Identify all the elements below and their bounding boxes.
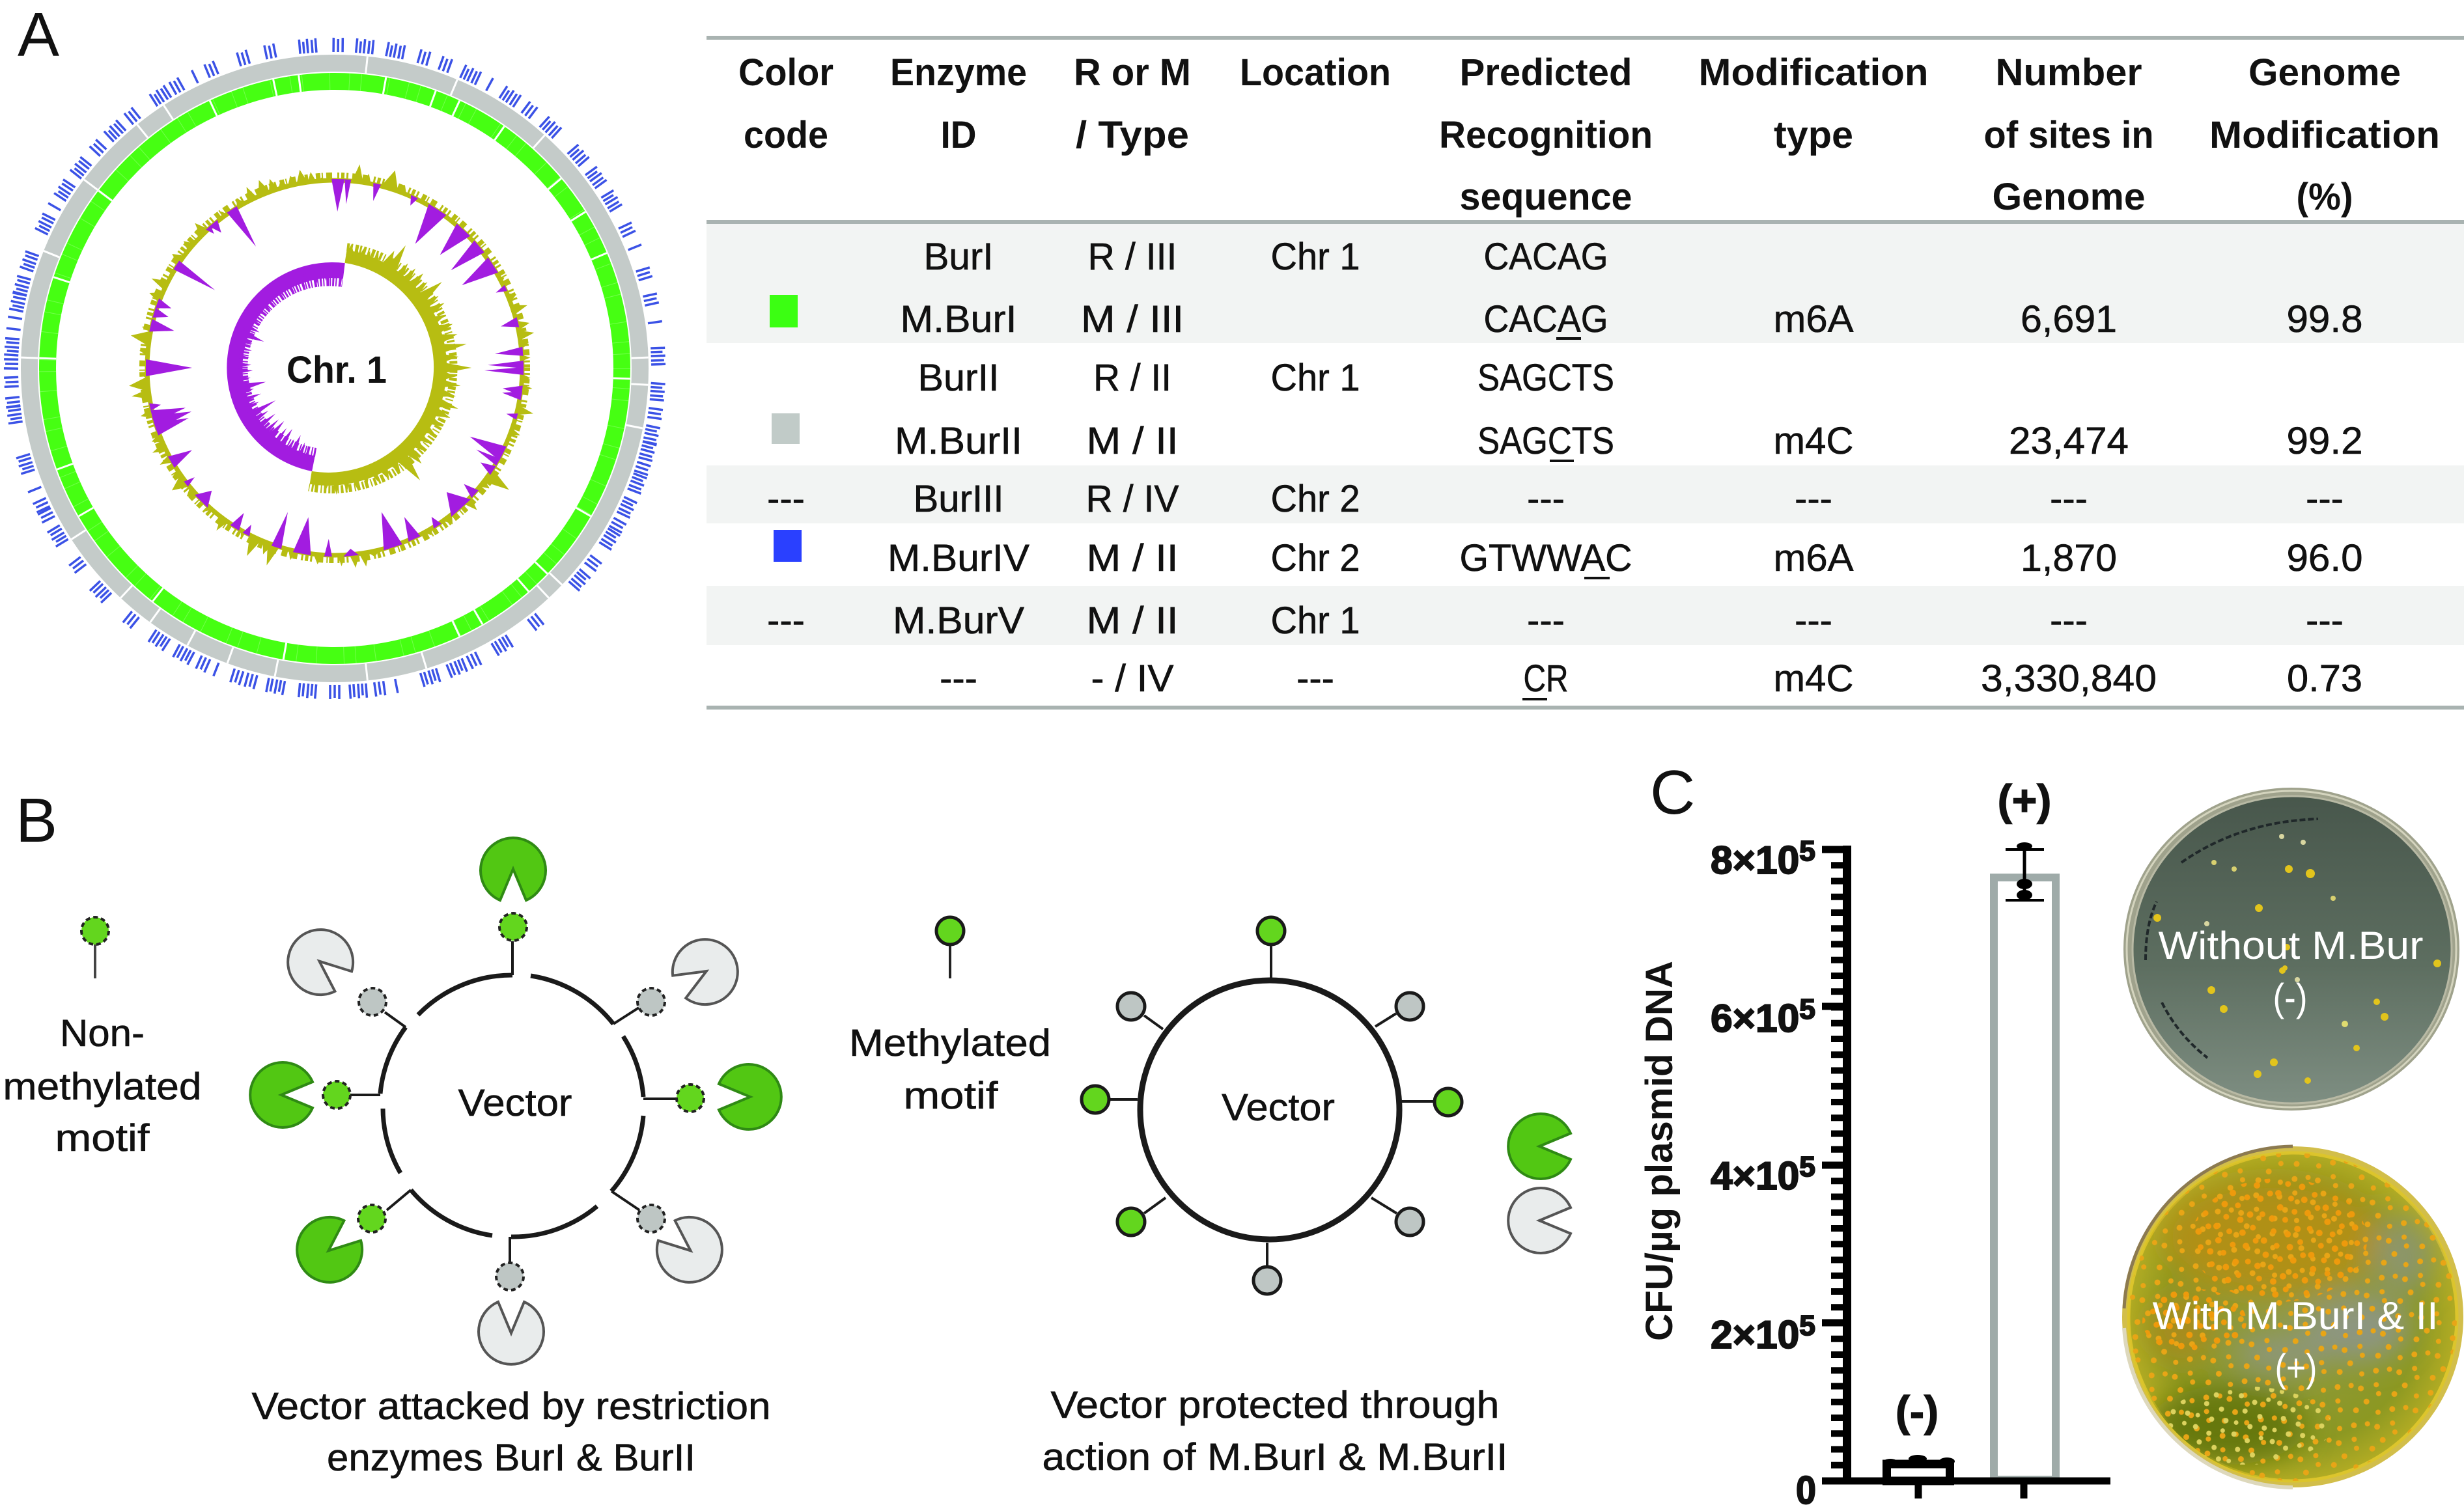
x axis (1822, 1481, 2110, 1498)
table body text: Chr 1 (1271, 600, 1360, 642)
plate photo: with M.BurI & II: (+) (2275, 1346, 2317, 1390)
table body text: --- (2306, 478, 2344, 520)
y tick labels (1711, 835, 1816, 1505)
table header (738, 51, 2440, 218)
error bar (+) (2006, 842, 2044, 900)
table body text: m6A (1774, 537, 1854, 579)
table body text: CR (1524, 657, 1568, 700)
table body text: SAGCTS (1477, 420, 1614, 462)
table body text: BurI (923, 236, 994, 278)
vector label: Vector (1222, 1086, 1335, 1129)
table body text: CACAG (1483, 298, 1608, 340)
label (+): (+) (1998, 776, 2051, 824)
table body text: BurII (918, 357, 999, 399)
table body text: BurIII (913, 478, 1004, 520)
colonies (2153, 834, 2441, 1084)
methylated motif dots (1082, 917, 1462, 1294)
y axis with ticks (1822, 846, 1851, 1484)
green track: CACAG sites (39, 75, 630, 659)
caption protected: action of M.BurI & M.BurII (1042, 1436, 1508, 1478)
table header: code (744, 114, 828, 156)
table body text: --- (1527, 600, 1565, 642)
y tick labels: 6×10 (1711, 997, 1799, 1040)
table header: Modification (1698, 51, 1929, 94)
table body text: --- (2050, 478, 2088, 520)
plate photo: without M.Bur: (-) (2273, 976, 2308, 1019)
panel B label: B (16, 786, 57, 855)
y axis title: CFU/µg plasmid DNA (1638, 961, 1681, 1341)
label (-): (-) (1896, 1387, 1939, 1435)
legend: methylated motif (849, 917, 1051, 1117)
table header: Location (1240, 51, 1391, 94)
table header: Color (738, 51, 833, 94)
table header: / Type (1076, 114, 1189, 156)
chromosome label: Chr. 1 (287, 349, 387, 391)
y tick labels: 5 (1799, 993, 1815, 1025)
y tick labels: 5 (1799, 835, 1815, 867)
table body text: CACAG (1483, 236, 1608, 278)
handwriting on plate (2146, 819, 2318, 1058)
table body text: - / IV (1091, 657, 1174, 700)
panel: enzyme table (707, 36, 2464, 710)
plate text: Without M.Bur (2158, 924, 2424, 967)
restriction enzymes attacking (250, 838, 781, 1364)
vector label: Vector (458, 1082, 572, 1124)
table body text: 96.0 (2287, 537, 2362, 579)
table header: Enzyme (890, 51, 1027, 94)
table body text: Chr 1 (1271, 357, 1360, 399)
color code legend squares (770, 295, 802, 562)
caption attacked: enzymes BurI & BurII (327, 1437, 695, 1479)
table body text: m4C (1774, 657, 1853, 700)
table header: of sites in (1983, 114, 2154, 156)
table body text: 3,330,840 (1981, 657, 2157, 700)
table body text: --- (2050, 600, 2088, 642)
legend: non-methylated motif (3, 917, 202, 1159)
plate photo: without M.Bur (2123, 788, 2459, 1111)
table body text: GTWWAC (1460, 537, 1632, 579)
table body text: --- (767, 600, 805, 642)
table body text: --- (1795, 478, 1832, 520)
table body text: Chr 2 (1271, 537, 1360, 579)
y tick labels: 8×10 (1711, 838, 1799, 882)
table body text: 6,691 (2021, 298, 2117, 340)
free restriction enzymes (1508, 1114, 1571, 1253)
y tick labels: 4×10 (1711, 1154, 1799, 1198)
caption attacked: Vector attacked by restriction (251, 1385, 771, 1428)
table header: sequence (1460, 176, 1632, 218)
caption protected: Vector protected through (1051, 1384, 1499, 1426)
table body text: M / II (1086, 600, 1179, 642)
table header: ID (940, 114, 977, 156)
intact vector circle with stems (1110, 944, 1435, 1267)
middle ring: GC content (128, 163, 535, 568)
table body text: 0.73 (2287, 657, 2362, 700)
y tick labels: 5 (1799, 1310, 1815, 1342)
panel: vector attacked (3, 838, 781, 1479)
table body text (767, 236, 2362, 700)
grey track: SAGCTS sites (21, 57, 649, 680)
legend: non-methylated motif: motif (55, 1117, 150, 1159)
dashed motif dots (323, 913, 704, 1290)
table body text: M.BurIV (888, 537, 1029, 579)
table body text: M / II (1086, 537, 1179, 579)
table body text: M.BurI (900, 298, 1017, 340)
table body text: --- (940, 657, 977, 700)
table header: Recognition (1439, 114, 1653, 156)
table body text: 23,474 (2009, 420, 2129, 462)
table header: (%) (2296, 176, 2353, 218)
colonies (2122, 1146, 2463, 1487)
panel C label: C (1650, 758, 1695, 827)
table body text: M / II (1086, 420, 1179, 462)
table body text: R / IV (1086, 478, 1179, 520)
table body text: --- (1795, 600, 1832, 642)
bar (-) (1883, 1455, 1955, 1481)
table body text: 99.8 (2287, 298, 2362, 340)
table header: Number (1995, 51, 2142, 94)
plate text: With M.BurI & II (2153, 1294, 2438, 1338)
table body text: --- (1296, 657, 1334, 700)
table body text: m6A (1774, 298, 1854, 340)
table header: Genome (1993, 176, 2145, 218)
legend: methylated motif: motif (904, 1075, 999, 1117)
plate photo: with M.BurI & II (2122, 1146, 2463, 1487)
table body text: M.BurV (893, 600, 1024, 642)
table body text: Chr 1 (1271, 236, 1360, 278)
table body text: --- (767, 478, 805, 520)
table body text: R / III (1087, 236, 1177, 278)
table body text: m4C (1774, 420, 1853, 462)
panel: circular genome map Chr. 1 (4, 38, 665, 699)
table body text: M.BurII (895, 420, 1022, 462)
table header: R or M (1074, 51, 1191, 94)
table body text: M / III (1081, 298, 1184, 340)
legend: non-methylated motif: methylated (3, 1066, 202, 1108)
caption attacked (251, 1385, 771, 1479)
panel: bar chart CFU (1638, 776, 2110, 1505)
underlined modified bases (1522, 338, 1610, 699)
table header: Predicted (1460, 51, 1632, 94)
table body text: --- (1527, 478, 1565, 520)
row shading (707, 222, 2464, 645)
table body text: R / II (1093, 357, 1171, 399)
table body text: 1,870 (2021, 537, 2117, 579)
agar patches (2122, 1146, 2463, 1487)
legend: non-methylated motif: Non- (60, 1012, 145, 1055)
table body text: SAGCTS (1477, 357, 1614, 399)
table rules (707, 36, 2464, 710)
table body text: Chr 2 (1271, 478, 1360, 520)
table header: type (1774, 114, 1853, 156)
broken vector circle with stems (350, 941, 677, 1264)
y tick labels: 2×10 (1711, 1313, 1799, 1357)
table header: Genome (2248, 51, 2401, 94)
blue track: GTWWAC sites (4, 38, 665, 699)
caption protected (1042, 1384, 1508, 1478)
table body text: 99.2 (2287, 420, 2362, 462)
table header: Modification (2209, 114, 2440, 156)
bar (+) (1994, 877, 2056, 1480)
inner ring: GC skew (234, 243, 471, 495)
y tick labels: 5 (1799, 1151, 1815, 1183)
table body text: --- (2306, 600, 2344, 642)
panel A label: A (18, 0, 59, 70)
legend: methylated motif: Methylated (849, 1022, 1051, 1064)
panel: vector protected (849, 917, 1571, 1478)
